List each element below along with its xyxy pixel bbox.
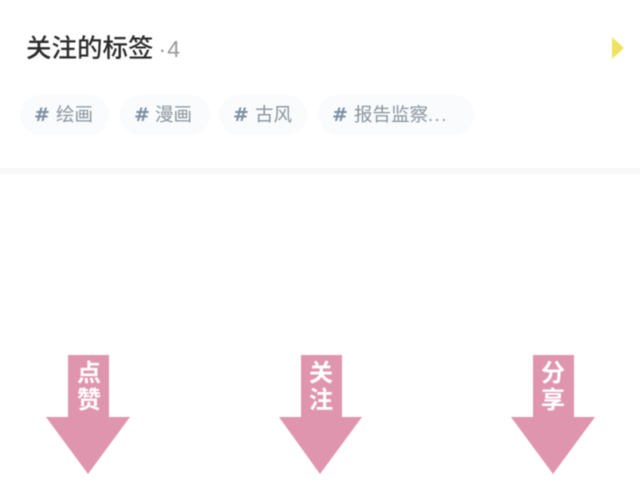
tag: 古风 [219,95,307,135]
arrow: 关注: 注 [309,387,333,414]
tag: 古风: 古风 [255,104,292,125]
title: 关注的标签·4 [26,35,180,63]
tag: 绘画: # [34,104,50,126]
tag: 报告监察 [318,95,474,135]
section divider [0,168,640,174]
tag: 报告监察: # [332,104,348,126]
arrow: 点赞: 赞 [77,387,101,414]
icon: yellow play triangle [611,36,624,60]
arrow: 分享: 分 [541,360,565,387]
arrow: 点赞: 点 [77,360,101,387]
arrow: 关注: 关 [309,360,333,387]
tag: 漫画: # [134,104,150,126]
tag: 报告监察: 报告监察... [354,104,448,125]
tag: 绘画 [20,95,109,135]
arrow: 点赞 [46,354,130,474]
tag: 绘画: 绘画 [56,104,93,125]
tag: 古风: # [233,104,249,126]
tag: 漫画 [120,95,210,135]
arrow: 关注 [278,354,362,474]
arrow: 分享: 享 [541,387,565,414]
tag: 漫画: 漫画 [155,104,192,125]
arrow: 分享 [510,354,596,474]
